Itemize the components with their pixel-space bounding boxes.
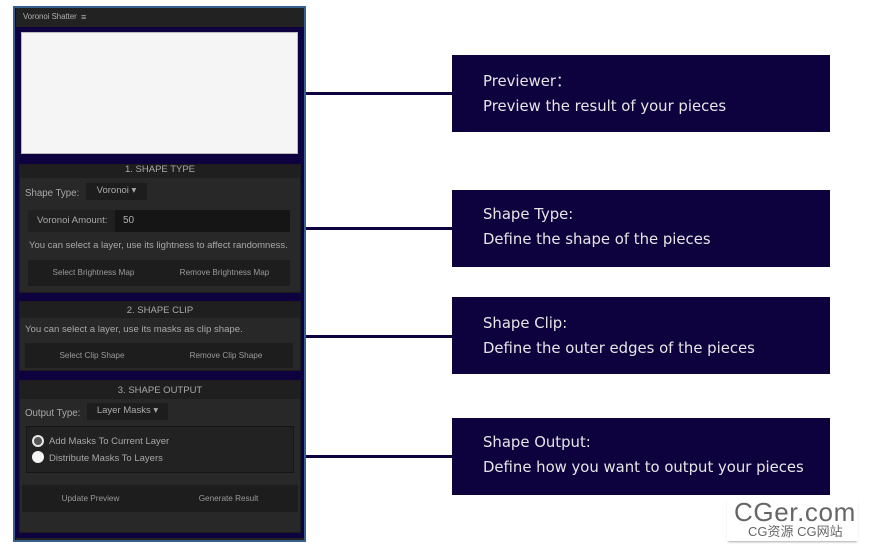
menu icon: ≡ — [81, 12, 86, 22]
shape type description: Define the shape of the pieces — [483, 230, 711, 248]
shape output heading: 3. SHAPE OUTPUT — [118, 385, 202, 396]
connector: shape output — [306, 455, 452, 458]
update preview button — [22, 485, 159, 512]
previewer title: Previewer： — [483, 72, 571, 90]
shape type title: Shape Type: — [483, 205, 573, 223]
remove clip shape button: Remove Clip Shape — [190, 351, 262, 360]
shape type heading: 1. SHAPE TYPE — [125, 164, 195, 175]
shape output title: Shape Output: — [483, 433, 591, 451]
clip buttons — [25, 343, 293, 368]
radio: distribute masks — [32, 451, 44, 463]
select brightness map button — [28, 260, 159, 286]
add masks label: Add Masks To Current Layer — [49, 436, 169, 447]
shape type heading — [20, 165, 300, 178]
voronoi amount value: 50 — [123, 215, 134, 226]
radio: add masks — [32, 435, 44, 447]
connector: previewer — [306, 92, 452, 95]
callout: shape type — [452, 190, 830, 267]
panel title bar — [16, 8, 304, 27]
select clip shape button — [25, 343, 159, 368]
plugin panel — [13, 6, 306, 542]
generate result button — [159, 485, 298, 512]
section: shape output — [19, 380, 301, 533]
panel title: Voronoi Shatter — [23, 12, 77, 21]
output type dropdown — [87, 403, 168, 420]
panel bottom strip — [16, 538, 304, 540]
voronoi amount field — [28, 210, 290, 232]
watermark subtitle: CG资源 CG网站 — [748, 524, 843, 539]
shape type label: Shape Type: — [25, 188, 79, 199]
section: shape type — [19, 164, 301, 293]
preview area — [21, 32, 298, 154]
shape type dropdown: Voronoi ▾ — [97, 185, 136, 196]
brightness hint: You can select a layer, use its lightness to affect randomness. — [29, 240, 288, 251]
brightness buttons — [28, 260, 290, 286]
select clip shape button: Select Clip Shape — [59, 351, 125, 360]
shape output heading — [20, 381, 300, 399]
watermark — [727, 498, 858, 541]
remove brightness map button — [159, 260, 290, 286]
shape clip heading — [20, 302, 300, 318]
remove brightness map button: Remove Brightness Map — [180, 268, 269, 277]
generate result button: Generate Result — [199, 494, 258, 503]
shape clip heading: 2. SHAPE CLIP — [127, 305, 193, 316]
section: shape clip — [19, 301, 301, 371]
shape output description: Define how you want to output your pieces — [483, 458, 804, 476]
remove clip shape button — [159, 343, 293, 368]
callout: shape output — [452, 418, 830, 495]
connector: shape type — [306, 227, 452, 230]
shape clip description: Define the outer edges of the pieces — [483, 339, 755, 357]
voronoi amount value — [115, 210, 290, 232]
callout: previewer — [452, 55, 830, 132]
callout: shape clip — [452, 297, 830, 374]
select brightness map button: Select Brightness Map — [53, 268, 134, 277]
watermark logo text: CGer.com — [734, 497, 856, 527]
distribute masks label: Distribute Masks To Layers — [49, 453, 163, 464]
update preview button: Update Preview — [62, 494, 119, 503]
output options box — [26, 426, 294, 473]
voronoi amount label: Voronoi Amount: — [37, 215, 107, 226]
output type label: Output Type: — [25, 408, 80, 419]
clip hint: You can select a layer, use its masks as clip shape. — [25, 324, 243, 335]
shape type dropdown — [86, 183, 147, 200]
previewer description: Preview the result of your pieces — [483, 97, 726, 115]
action buttons — [22, 485, 298, 512]
shape clip title: Shape Clip: — [483, 314, 567, 332]
connector: shape clip — [306, 335, 452, 338]
output type dropdown: Layer Masks ▾ — [97, 405, 158, 416]
